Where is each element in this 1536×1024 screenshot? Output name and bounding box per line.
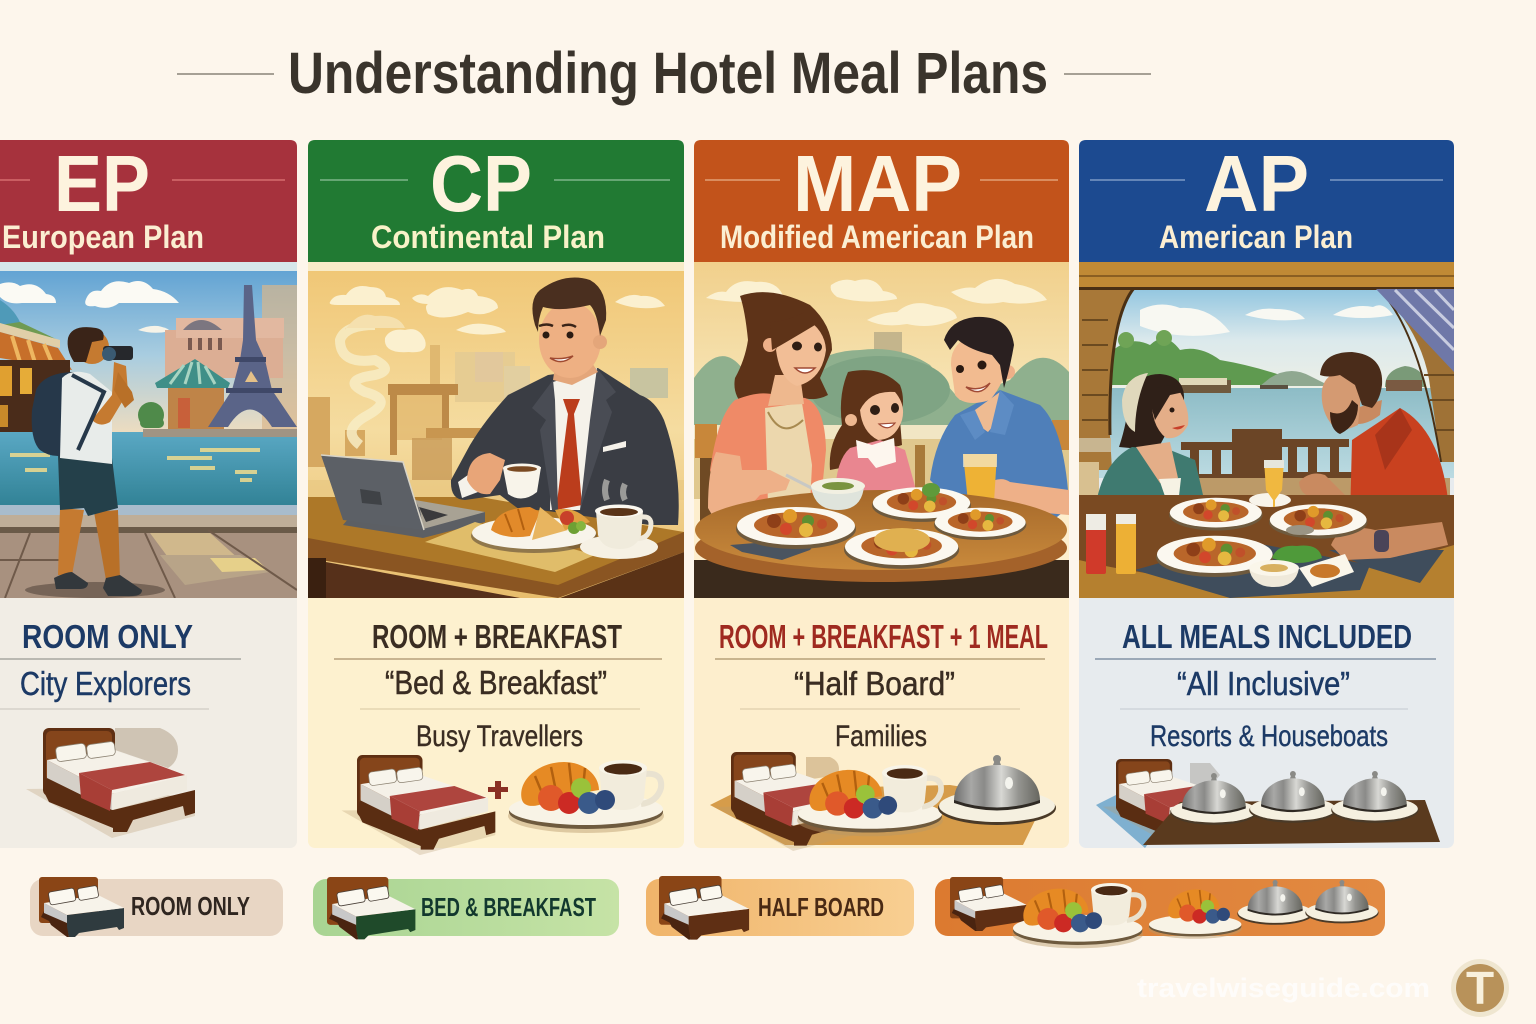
left building — [0, 300, 20, 324]
plan summary: AP: “All Inclusive” — [1177, 665, 1350, 702]
header: EP: European Plan — [2, 219, 204, 255]
icon: breakfast food — [521, 762, 615, 814]
plan summary: CP: ROOM + BREAKFAST — [372, 618, 622, 655]
header: MAP: MAP — [793, 139, 962, 228]
woman — [1119, 374, 1184, 448]
panel body: CP — [308, 140, 684, 848]
plan summary: CP: “Bed & Breakfast” — [385, 664, 607, 701]
right building — [165, 330, 283, 378]
water — [0, 432, 297, 512]
illustration: family dining — [694, 262, 1069, 598]
man — [1350, 408, 1448, 495]
header: CP — [308, 139, 684, 262]
icon: breakfast food — [809, 770, 897, 818]
plan summary: CP — [334, 618, 662, 753]
suit — [451, 368, 679, 525]
woman — [734, 292, 832, 407]
icon: cloche — [938, 755, 1056, 825]
panel: CP — [308, 139, 684, 855]
legend pill: half board — [646, 876, 914, 940]
plan summary: EP — [0, 618, 241, 709]
plan summary: MAP — [715, 618, 1048, 753]
header: MAP — [694, 139, 1069, 262]
header: EP — [0, 139, 297, 262]
plan summary: AP — [1095, 618, 1436, 753]
legend pill: bed and breakfast: BED & BREAKFAST — [421, 892, 596, 922]
header: AP: AP — [1204, 139, 1309, 228]
plates — [1169, 498, 1263, 531]
plan summary: AP: Resorts & Houseboats — [1150, 720, 1388, 753]
icon: plate base — [797, 799, 943, 836]
icon: gray shape behind bed — [1190, 763, 1220, 785]
man — [930, 390, 1068, 530]
glasses — [1249, 493, 1291, 507]
header: MAP: Modified American Plan — [720, 219, 1034, 255]
table — [308, 480, 684, 494]
girl — [830, 370, 903, 470]
plan summary: EP: ROOM ONLY — [22, 618, 193, 655]
icon: bed — [716, 752, 868, 851]
panel: AP — [1079, 139, 1454, 848]
icon: coffee cup — [599, 760, 661, 810]
icon: tan shape behind bed — [806, 757, 839, 780]
plan summary: MAP: “Half Board” — [794, 665, 955, 702]
header: CP: Continental Plan — [371, 219, 605, 255]
panel body: MAP — [694, 140, 1069, 848]
head — [553, 365, 598, 385]
icon: bed — [26, 728, 195, 838]
table — [1079, 495, 1454, 573]
plan summary: MAP: ROOM + BREAKFAST + 1 MEAL — [719, 618, 1048, 655]
header: CP: CP — [430, 139, 532, 228]
legend pill: half board: HALF BOARD — [758, 892, 884, 922]
logo badge: T — [1466, 962, 1494, 1014]
panel body: AP — [1079, 140, 1454, 848]
header: EP: EP — [54, 139, 150, 228]
logo badge — [1451, 959, 1509, 1017]
Eiffel tower — [208, 285, 297, 427]
icon: plus — [488, 781, 508, 799]
panel body: EP — [0, 140, 297, 848]
legend pill: room only — [30, 877, 283, 937]
icon: bed — [342, 755, 495, 855]
icon: cloche 2 — [1249, 771, 1337, 823]
legend pill: bed and breakfast — [313, 877, 619, 939]
header: AP — [1079, 139, 1454, 262]
icon: wooden tray — [1143, 800, 1440, 845]
icon: tray — [710, 785, 1045, 845]
hand and cup — [458, 475, 478, 498]
plan summary: AP: ALL MEALS INCLUDED — [1122, 618, 1412, 655]
icon: tan shape behind bed — [115, 728, 178, 768]
icon: cloche 1 — [1170, 773, 1258, 825]
plan summary: EP: City Explorers — [20, 665, 191, 702]
illustration: photographer at waterfront — [0, 262, 297, 598]
railing — [1181, 429, 1352, 483]
chairs — [695, 424, 717, 458]
illustration: business traveller at breakfast — [308, 262, 684, 598]
quay and paving — [0, 505, 297, 515]
icon: coffee cup — [882, 765, 941, 812]
pavilion — [168, 388, 224, 429]
watermark: travelwiseguide.com — [1137, 973, 1430, 1003]
plan summary: MAP: Families — [835, 720, 927, 753]
header: AP: American Plan — [1159, 219, 1353, 255]
far shore — [1112, 340, 1278, 385]
breakfast — [425, 522, 595, 572]
icon: blue shadow — [1096, 795, 1180, 848]
plan summary: CP: Busy Travellers — [416, 720, 583, 753]
illustration: couple on houseboat — [1079, 262, 1454, 598]
panel: MAP — [694, 139, 1069, 851]
table — [694, 560, 1069, 598]
icon: bed — [1103, 759, 1235, 845]
icon: plate base — [508, 793, 664, 833]
icon: cloche 3 — [1331, 771, 1419, 823]
laptop — [343, 500, 485, 538]
steam — [340, 325, 385, 445]
forearm and watch — [1331, 522, 1448, 560]
panel: EP — [0, 139, 297, 848]
skyline — [308, 397, 330, 467]
arch frame — [1079, 290, 1130, 470]
person — [32, 327, 142, 596]
title: Understanding Hotel Meal Plans — [288, 41, 1048, 106]
legend pill: room only: ROOM ONLY — [131, 891, 250, 921]
legend pill: all inclusive — [935, 877, 1385, 948]
